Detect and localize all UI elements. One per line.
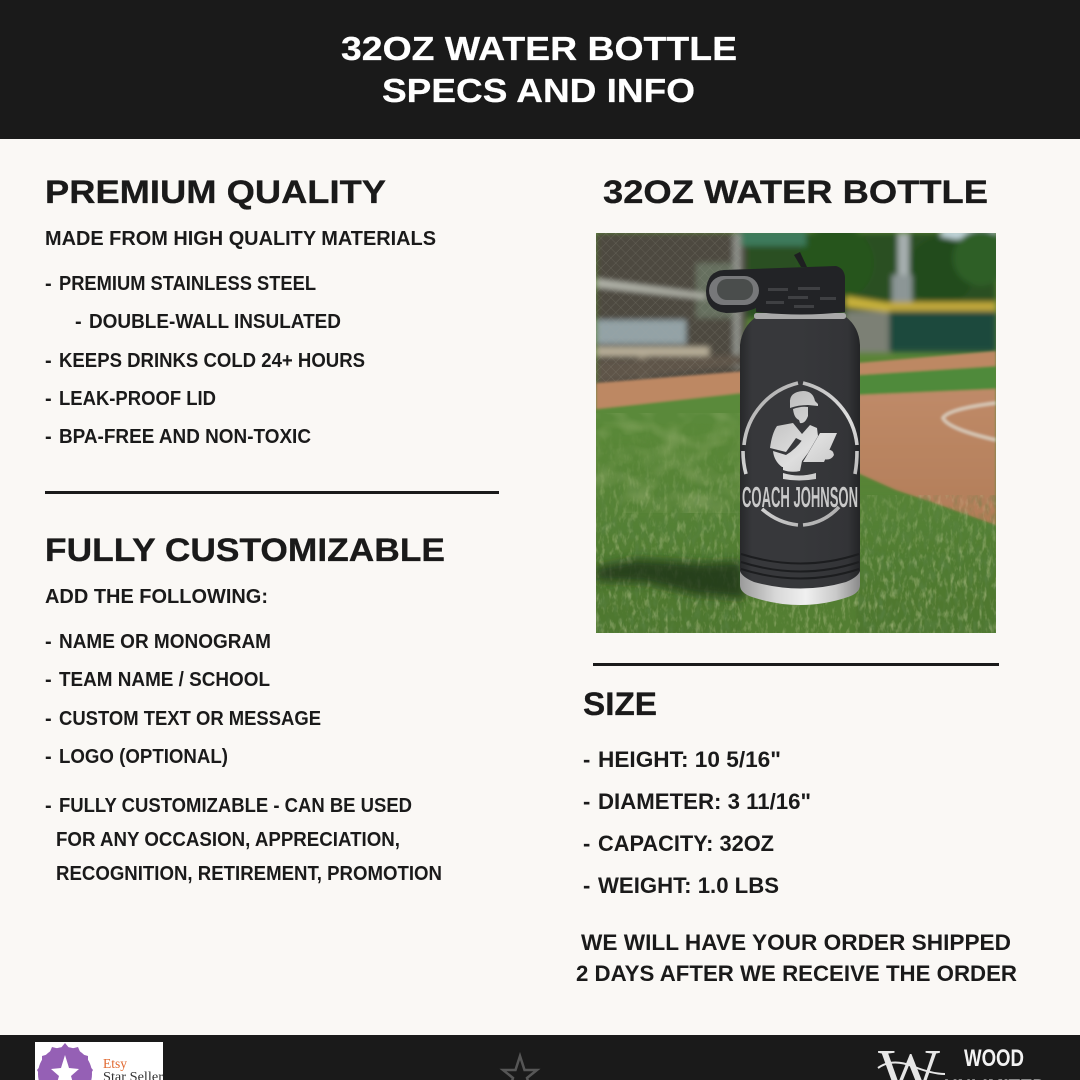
feature list: KEEPS DRINKS COLD 24+ HOURS — [59, 350, 365, 372]
feature list: - — [75, 311, 82, 333]
badge: etsy star seller — [35, 1042, 163, 1080]
badge: etsy star seller: Etsy — [103, 1057, 127, 1072]
size specifications — [583, 747, 811, 898]
shipping note: 2 DAYS AFTER WE RECEIVE THE ORDER — [576, 961, 1017, 986]
size specifications: - — [583, 747, 590, 772]
size specifications: WEIGHT: 1.0 LBS — [598, 873, 779, 898]
feature list: BPA-FREE AND NON-TOXIC — [59, 426, 311, 448]
heading: premium quality: PREMIUM QUALITY — [45, 174, 386, 210]
feature list: DOUBLE-WALL INSULATED — [89, 311, 341, 333]
shipping note: WE WILL HAVE YOUR ORDER SHIPPED — [581, 930, 1011, 955]
engraved coach logo — [742, 383, 858, 525]
title: 32OZ WATER BOTTLE — [341, 30, 737, 67]
panel: size — [583, 686, 811, 898]
title: SPECS AND INFO — [382, 72, 695, 109]
customization list: NAME OR MONOGRAM — [59, 631, 271, 653]
heading: size: SIZE — [583, 686, 657, 722]
customization list: CUSTOM TEXT OR MESSAGE — [59, 708, 321, 730]
footer band — [0, 1035, 1080, 1080]
size specifications: DIAMETER: 3 11/16" — [598, 789, 811, 814]
feature list: - — [45, 388, 52, 410]
bottle neck ring — [754, 313, 846, 319]
shipping note — [576, 930, 1017, 986]
customization list: - — [45, 669, 52, 691]
bottle body — [740, 317, 860, 588]
icon: star — [503, 1056, 537, 1080]
intro: add the following: ADD THE FOLLOWING: — [45, 586, 268, 608]
feature list: - — [45, 350, 52, 372]
feature list: PREMIUM STAINLESS STEEL — [59, 273, 316, 295]
heading: fully customizable: FULLY CUSTOMIZABLE — [45, 532, 445, 568]
occasions note: FULLY CUSTOMIZABLE - CAN BE USED — [59, 795, 412, 817]
bottle — [706, 252, 860, 605]
occasions note: RECOGNITION, RETIREMENT, PROMOTION — [56, 863, 442, 885]
photo background: ballfield — [596, 225, 1009, 633]
size specifications: CAPACITY: 32OZ — [598, 831, 774, 856]
title — [341, 30, 737, 109]
size specifications: - — [583, 789, 590, 814]
icon: coach figure — [770, 391, 837, 480]
customization list: - — [45, 708, 52, 730]
size specifications: HEIGHT: 10 5/16" — [598, 747, 781, 772]
occasions note: FOR ANY OCCASION, APPRECIATION, — [56, 829, 400, 851]
customization list: LOGO (OPTIONAL) — [59, 746, 228, 768]
bottle base — [740, 571, 860, 605]
size specifications: - — [583, 873, 590, 898]
customization list: TEAM NAME / SCHOOL — [59, 669, 270, 691]
panel: premium quality — [45, 174, 436, 448]
customization list: - — [45, 746, 52, 768]
header band — [0, 0, 1080, 139]
heading: product name: 32OZ WATER BOTTLE — [603, 174, 988, 210]
bottle lid with handle — [706, 252, 845, 314]
feature list — [45, 273, 365, 448]
grass texture — [596, 455, 996, 633]
feature list: LEAK-PROOF LID — [59, 388, 216, 410]
feature list: - — [45, 426, 52, 448]
occasions note — [45, 795, 442, 885]
feature list: - — [45, 273, 52, 295]
logo: wood unlimited — [878, 1049, 1042, 1080]
product photo — [596, 225, 1009, 633]
product photo: COACH JOHNSON — [742, 482, 858, 514]
occasions note: - — [45, 795, 52, 817]
panel: fully customizable — [45, 532, 445, 885]
size specifications: - — [583, 831, 590, 856]
customization list — [45, 631, 321, 768]
customization list: - — [45, 631, 52, 653]
logo: wood unlimited: WOOD — [964, 1045, 1024, 1072]
intro: materials: MADE FROM HIGH QUALITY MATERIALS — [45, 228, 436, 250]
